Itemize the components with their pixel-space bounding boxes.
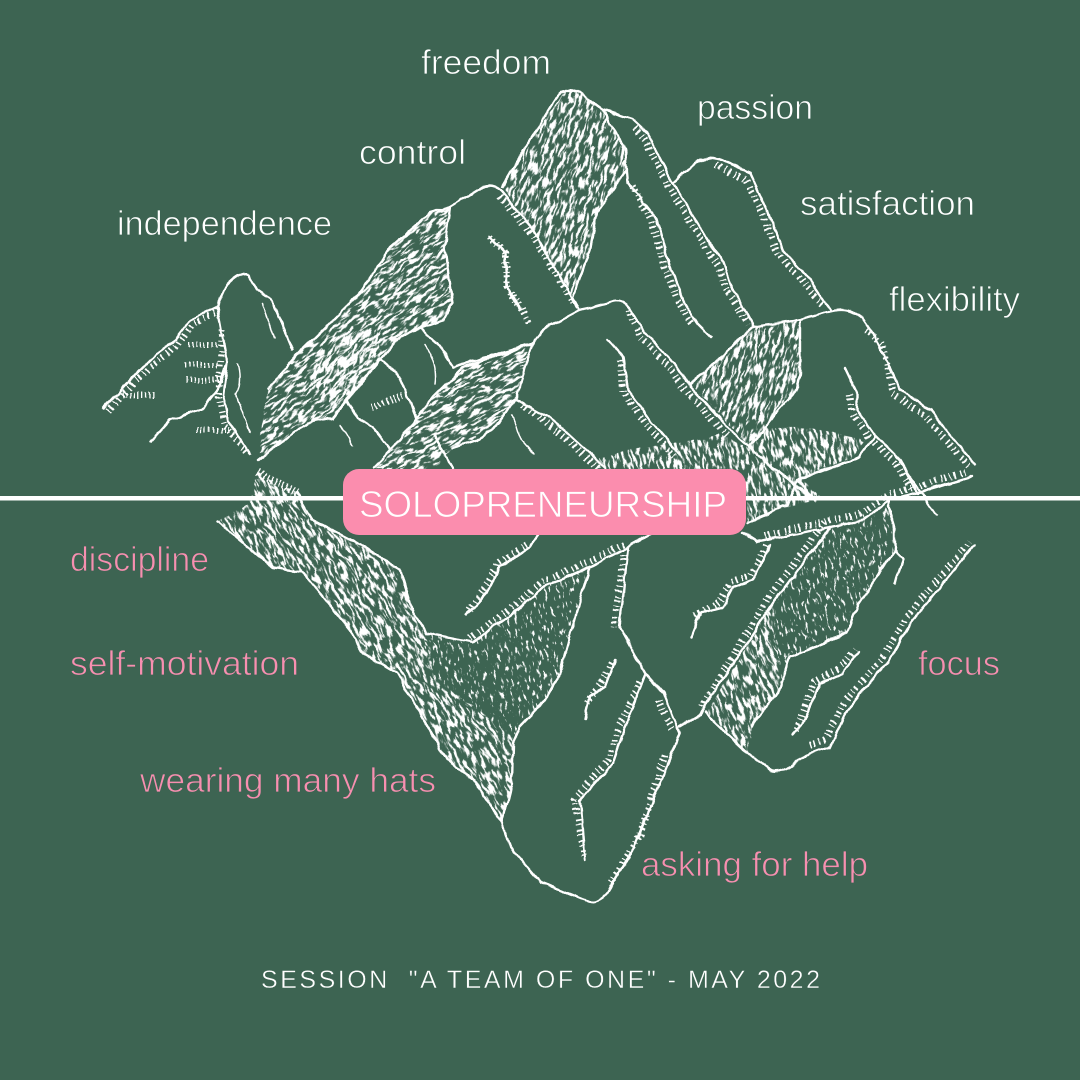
flexibility texture [658, 292, 832, 474]
label: freedom: freedom [421, 44, 551, 82]
behind ridges [347, 328, 533, 450]
reflected ridge outline [297, 493, 650, 642]
small left peak [104, 274, 293, 455]
label: control: control [359, 134, 466, 172]
title pill [343, 469, 746, 535]
title pill: SOLOPRENEURSHIP [359, 484, 727, 525]
center-left outline [373, 343, 533, 468]
label: wearing many hats: wearing many hats [139, 762, 436, 800]
right texture [659, 580, 828, 776]
label: flexibility: flexibility [889, 281, 1020, 319]
front center mountain [533, 301, 815, 500]
flexibility peak outlines [690, 310, 975, 465]
freedom peak texture [441, 53, 688, 334]
right reflected outlines [705, 545, 975, 771]
passion mountain [673, 158, 830, 310]
lower slope ridge [800, 437, 875, 480]
label: focus: focus [918, 645, 1000, 683]
label: discipline: discipline [70, 541, 209, 579]
center-left texture [318, 274, 588, 539]
control ridge outline [258, 186, 577, 460]
label: passion: passion [697, 89, 813, 127]
label: self-motivation: self-motivation [70, 645, 299, 683]
stippled underside [373, 525, 630, 779]
hatched lower slope [574, 372, 886, 579]
iceberg mountain: above the surface [104, 53, 975, 579]
freedom peak outlines [502, 90, 627, 310]
horizon line [0, 496, 1080, 500]
right stippled underside [730, 476, 938, 716]
iceberg mountain: below the surface [73, 350, 975, 945]
highlight patch on control ridge [279, 302, 409, 433]
reflected inner lines [467, 535, 537, 615]
label: satisfaction: satisfaction [800, 185, 975, 223]
label: asking for help: asking for help [641, 846, 868, 884]
central reflected ridges [620, 547, 680, 733]
left dense ridge texture [73, 350, 658, 945]
control inner line [490, 237, 532, 327]
lines beside the title pill [747, 460, 937, 523]
label: independence: independence [117, 205, 332, 243]
control ridge texture [133, 111, 577, 556]
footer caption: SESSION "A TEAM OF ONE" - MAY 2022 [261, 966, 820, 994]
